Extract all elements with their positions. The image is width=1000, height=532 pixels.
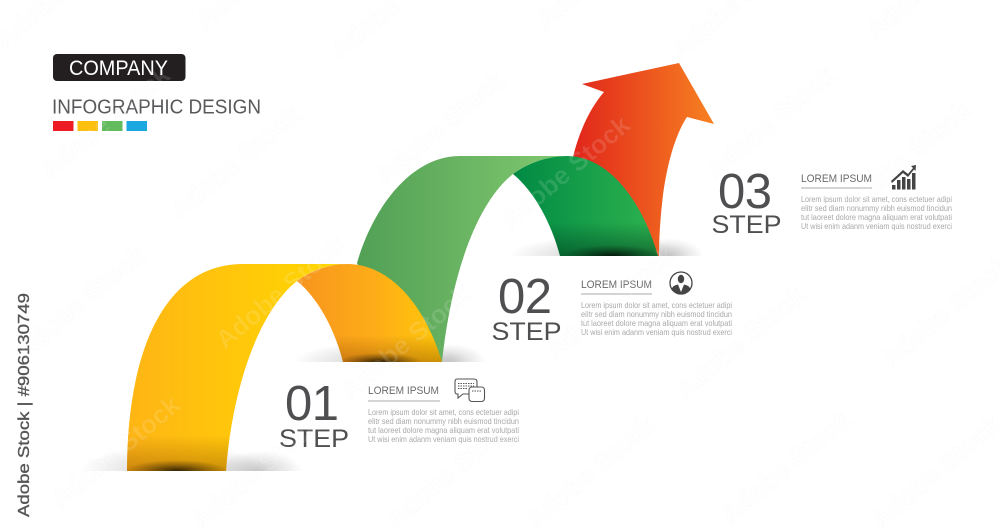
- arrow: red head, step 3: [560, 63, 714, 256]
- step 01 block: LOREM IPSUM: [368, 385, 439, 397]
- step 01 block: STEP: [279, 425, 349, 453]
- step 02 block: STEP: [492, 318, 562, 346]
- step 02 block: Lorem ipsum dolor sit amet, cons ectetuer adipi: [581, 300, 732, 310]
- watermark: Adobe Stock: [165, 99, 306, 225]
- watermark: Adobe Stock: [380, 409, 521, 532]
- step 02 block: LOREM IPSUM: [581, 279, 652, 291]
- watermark: Adobe Stock: [335, 279, 476, 405]
- step 02 block: Ut wisi enim adanm veniam quis nostrud exerci: [581, 327, 732, 337]
- watermark: Adobe Stock: [35, 59, 176, 185]
- watermark: Adobe Stock: [370, 64, 511, 190]
- arch: orange back band, step 1: [297, 264, 442, 362]
- colour legend: [53, 121, 147, 131]
- watermark: Adobe Stock: [210, 229, 351, 355]
- step 03 block: LOREM IPSUM: [801, 173, 872, 185]
- step 01 block: [279, 377, 519, 453]
- step 03 block: [712, 165, 952, 239]
- watermark: Adobe Stock: [495, 109, 636, 235]
- step 02 block: elitr sed diam nonummy nibh euismod tincidun: [581, 309, 732, 319]
- step 01 block: tut laoreet dolore magna aliquam erat volutpati: [368, 425, 519, 435]
- step 03 block: tut laoreet dolore magna aliquam erat volutpati: [801, 212, 952, 222]
- step 03 block: 03: [718, 165, 772, 219]
- watermark: Adobe Stock: [540, 239, 681, 365]
- arch: yellow front band, step 1: [120, 264, 347, 482]
- icon: chat bubbles: [455, 379, 484, 402]
- step 02 block: [492, 270, 732, 346]
- step 03 block: elitr sed diam nonummy nibh euismod tincidun: [801, 203, 952, 213]
- arch: dark green back band, step 2: [513, 156, 658, 256]
- step 03 block: Lorem ipsum dolor sit amet, cons ectetuer adipi: [801, 194, 952, 204]
- watermark: Adobe Stock: [835, 94, 976, 220]
- watermark: Adobe Stock: [715, 404, 856, 530]
- watermark: Adobe Stock: [520, 409, 661, 532]
- title: INFOGRAPHIC DESIGN: [52, 96, 261, 118]
- watermark: Adobe Stock: [10, 239, 151, 365]
- watermark: Adobe Stock: [700, 59, 841, 185]
- side credit: Adobe Stock | #906130749: [16, 293, 33, 517]
- icon: person in circle: [670, 272, 692, 294]
- company badge: [53, 54, 186, 81]
- step 02 block: 02: [498, 270, 552, 324]
- icon: growth chart: [891, 165, 916, 190]
- floor shadows: [80, 236, 704, 497]
- step 03 block: STEP: [712, 211, 782, 239]
- step 01 block: Lorem ipsum dolor sit amet, cons ectetuer adipi: [368, 407, 519, 417]
- step 02 block: tut laoreet dolore magna aliquam erat volutpati: [581, 318, 732, 328]
- arch: green front band, step 2: [357, 156, 567, 362]
- company badge: COMPANY: [69, 57, 168, 80]
- watermark: Adobe Stock: [45, 389, 186, 515]
- watermark: Adobe Stock: [670, 279, 811, 405]
- step 01 block: 01: [285, 377, 339, 431]
- step 03 block: Ut wisi enim adanm veniam quis nostrud exerci: [801, 221, 952, 231]
- step 01 block: elitr sed diam nonummy nibh euismod tincidun: [368, 416, 519, 426]
- watermark: Adobe Stock: [185, 409, 326, 532]
- step 01 block: Ut wisi enim adanm veniam quis nostrud exerci: [368, 434, 519, 444]
